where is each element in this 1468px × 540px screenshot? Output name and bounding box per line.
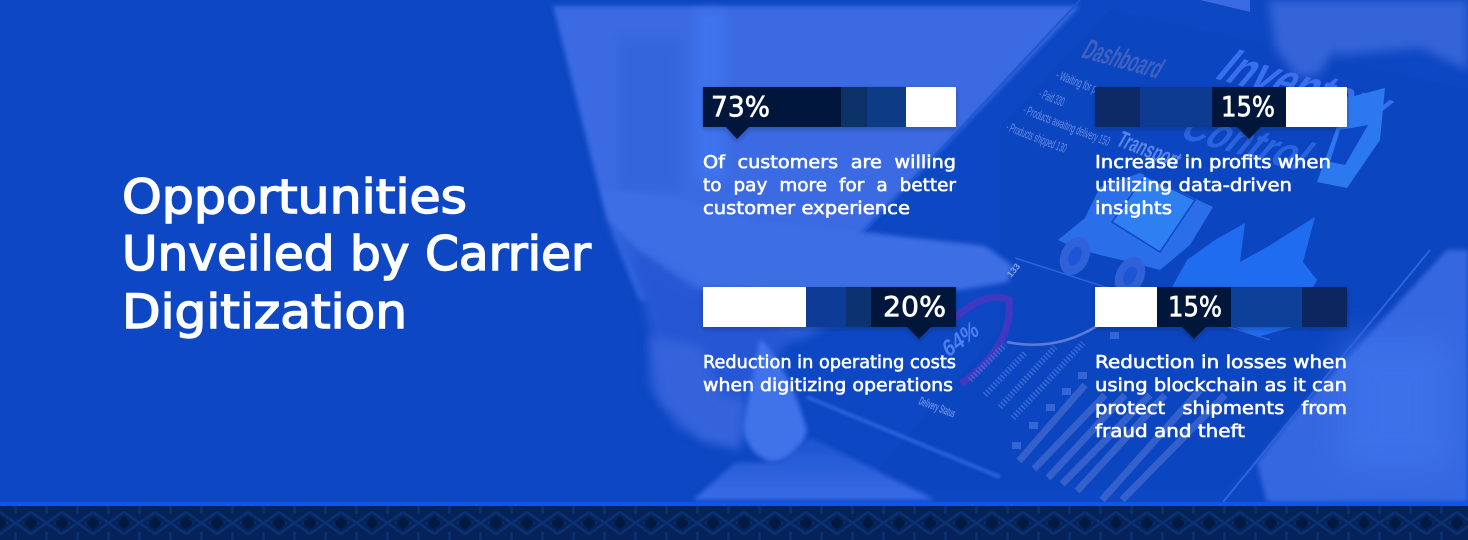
bar chart on tablet xyxy=(1019,385,1225,500)
tablet right edge line xyxy=(1223,250,1430,502)
title: Opportunities xyxy=(122,170,467,225)
tablet top triangle highlight xyxy=(1200,0,1250,12)
control title: Control xyxy=(1170,105,1324,179)
value: 73% xyxy=(711,90,770,123)
dashboard list xyxy=(1004,67,1112,156)
blurred backdrop behind the tablet xyxy=(553,6,1080,300)
description: Reduction in operating costs xyxy=(703,352,956,373)
dashboard list: - Products shipped 130 xyxy=(1004,119,1069,156)
tablet bottom edge highlight xyxy=(807,397,1000,477)
footer accent line xyxy=(0,502,1468,506)
footer pattern band xyxy=(0,506,1468,540)
background photo: hand holding tablet xyxy=(553,0,1468,502)
description: insights xyxy=(1095,198,1172,219)
right background highlights xyxy=(1340,340,1450,470)
description: Of customers are willing xyxy=(703,152,956,173)
progress bar xyxy=(703,287,956,339)
background photo: hand holding tablet: Delivery Status xyxy=(917,394,958,420)
description xyxy=(1095,152,1331,219)
value: 15% xyxy=(1221,90,1275,123)
dotted bars xyxy=(970,343,1083,418)
fingers top right xyxy=(1268,0,1468,78)
pointing finger xyxy=(603,190,1012,298)
progress bar xyxy=(703,87,956,139)
description: when digitizing operations xyxy=(703,375,953,396)
right background xyxy=(1257,250,1468,502)
dashboard list: - Products awaiting delivery 150 xyxy=(1021,102,1112,149)
tablet lower face xyxy=(693,437,935,500)
dashboard title: Dashboard xyxy=(1077,34,1170,85)
lower finger xyxy=(650,337,745,450)
description: to pay more for a better xyxy=(703,175,957,196)
backdrop darker column xyxy=(620,40,680,190)
chart baseline line xyxy=(1015,258,1270,340)
chart axis labels xyxy=(1012,332,1119,449)
description: fraud and theft xyxy=(1095,421,1245,442)
description: Increase in profits when xyxy=(1095,152,1331,173)
value: 15% xyxy=(1168,290,1222,323)
title: Digitization xyxy=(122,285,407,340)
progress bar xyxy=(1095,87,1347,139)
shadow of hand xyxy=(605,213,880,340)
dashboard list: - Paid 330 xyxy=(1037,86,1067,109)
donut gauge xyxy=(946,297,1009,384)
description xyxy=(703,352,956,396)
thumb tip xyxy=(743,338,807,462)
description: protect shipments from xyxy=(1095,398,1347,419)
dashboard list: - Waiting for pay xyxy=(1054,67,1107,99)
tablet screen xyxy=(860,10,1468,490)
title xyxy=(122,170,592,340)
description xyxy=(1095,352,1347,442)
curve line xyxy=(1007,326,1097,345)
gauge value: 64% xyxy=(939,315,982,362)
description xyxy=(703,152,957,219)
palm under finger xyxy=(633,250,790,440)
tablet edge highlight xyxy=(860,0,1080,236)
stat card: 15% losses xyxy=(1095,287,1347,442)
stat card: 73% xyxy=(703,87,957,219)
arrow graphic xyxy=(1317,88,1385,188)
stat card: 15% profits xyxy=(1095,87,1347,219)
title: Unveiled by Carrier xyxy=(122,227,592,282)
stat card: 20% xyxy=(703,287,956,396)
backdrop vertical highlight xyxy=(695,10,725,180)
progress bar xyxy=(1095,287,1347,339)
description: using blockchain as it can xyxy=(1095,375,1347,396)
transport label: Transport xyxy=(1112,127,1186,174)
tablet tile label: 133 xyxy=(1005,261,1022,279)
description: utilizing data-driven xyxy=(1095,175,1292,196)
flame area chart xyxy=(1165,217,1317,337)
truck graphic xyxy=(1054,173,1213,300)
value: 20% xyxy=(883,290,946,323)
description: customer experience xyxy=(703,198,910,219)
description: Reduction in losses when xyxy=(1095,352,1347,373)
